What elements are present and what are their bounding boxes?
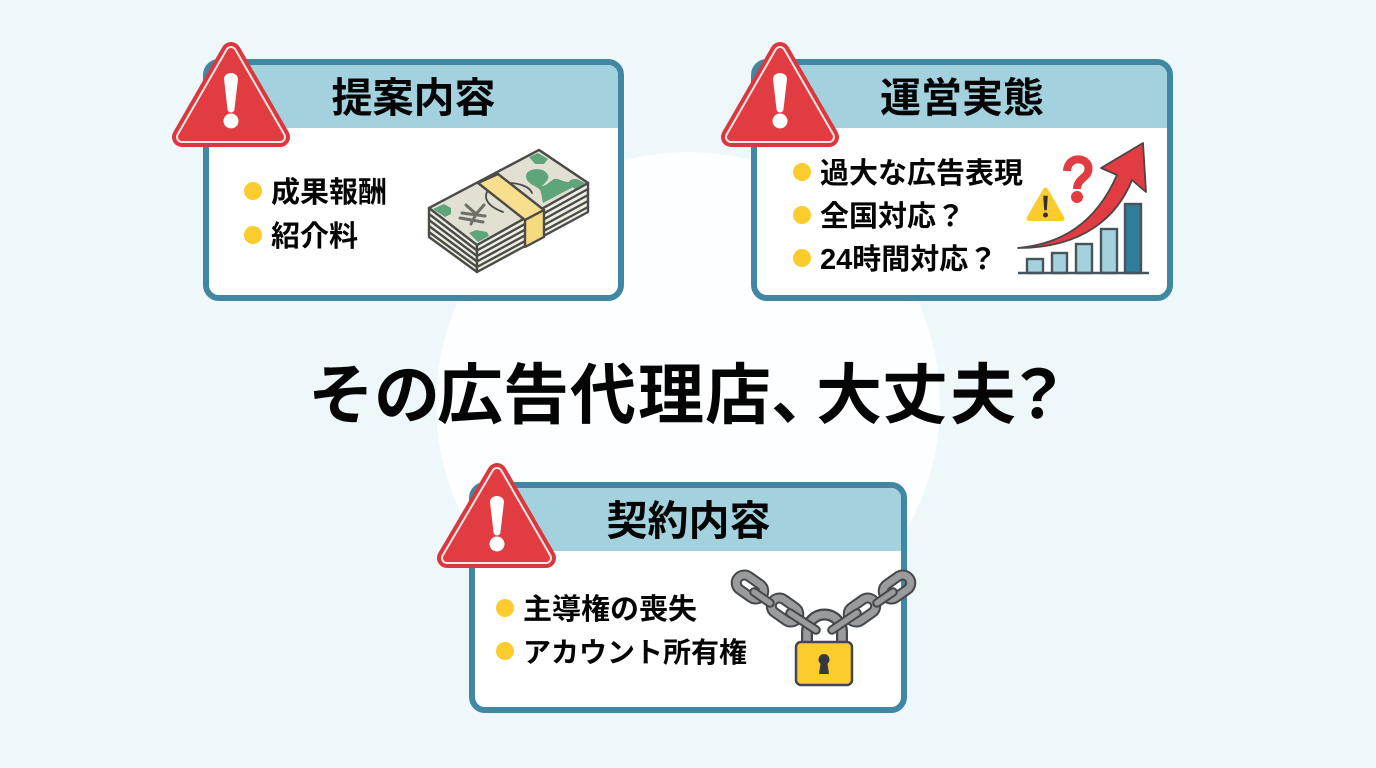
icon: chained padlock: [733, 572, 914, 685]
card frame: [472, 485, 904, 710]
heading: 提案内容: [332, 75, 496, 121]
bullet list: 紹介料: [271, 220, 358, 253]
bullet list: 過大な広告表現: [820, 157, 1023, 190]
bullet list: アカウント所有権: [523, 637, 747, 668]
right chain: [832, 572, 914, 630]
card header band: [209, 65, 618, 128]
icon: warning triangle: [731, 52, 829, 137]
panel: 運営実態: [731, 52, 1170, 298]
bullet list: [496, 593, 747, 668]
bullet list: 成果報酬: [271, 176, 387, 209]
bullet list: [244, 176, 387, 253]
panel: 提案内容: [182, 52, 621, 298]
chart bars: [1018, 204, 1149, 273]
keyhole: [819, 654, 829, 674]
panel: 契約内容: [447, 473, 914, 710]
card header band: [475, 488, 901, 551]
bullet list: 24時間対応？: [820, 243, 997, 276]
left chain: [733, 572, 816, 630]
bullet list: [793, 157, 1023, 276]
bullet list: 全国対応？: [820, 200, 965, 233]
icon: warning triangle: [447, 473, 546, 558]
card header band: [757, 65, 1167, 128]
padlock body: [796, 642, 852, 685]
icon: warning triangle: [182, 52, 280, 137]
card frame: [206, 62, 621, 298]
title: その広告代理店、大丈夫？: [308, 358, 1071, 432]
heading: 契約内容: [606, 498, 770, 544]
background white circle: [436, 152, 940, 656]
arrow: [1018, 143, 1146, 248]
heading: 運営実態: [880, 75, 1044, 121]
card frame: [754, 62, 1170, 298]
icon: stack of yen bills: [429, 150, 588, 272]
icon: small warning triangle: [1029, 190, 1062, 218]
question mark dot: [1071, 191, 1083, 203]
bar chart with rising arrow: [1018, 143, 1149, 273]
padlock shackle: [807, 614, 842, 642]
icon: question mark: [1067, 159, 1089, 189]
bullet list: 主導権の喪失: [523, 593, 697, 626]
